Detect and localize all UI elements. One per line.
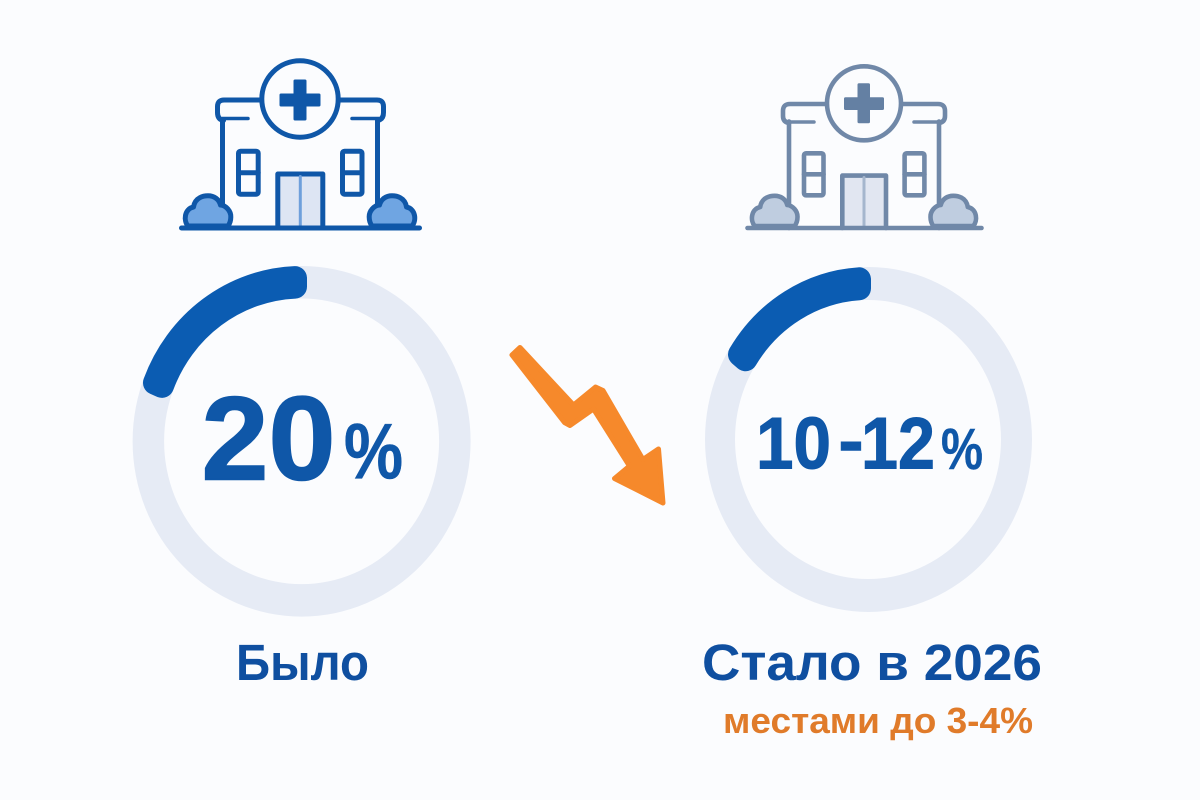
chart: ring before	[133, 266, 471, 617]
value: 10-12%: 12	[861, 404, 935, 484]
label: стало в 2026: Стало в 2026	[702, 634, 1042, 691]
icon: hospital building (muted)	[748, 66, 982, 228]
icon: hospital building (blue)	[182, 61, 420, 228]
value: 20%	[202, 372, 403, 506]
value: 20%: 20	[202, 372, 336, 506]
note: местами до 3-4%: местами до 3-4%	[723, 700, 1033, 741]
label: было: Было	[236, 634, 369, 691]
arrow: falling orange zigzag	[512, 348, 663, 503]
panel: before (было)	[133, 61, 471, 691]
panel: after (стало)	[702, 66, 1042, 741]
value: 10-12%: -	[838, 400, 864, 481]
value: 10-12%: 10	[756, 404, 831, 484]
value: 10-12%	[756, 400, 983, 484]
value: 10-12%: %	[941, 417, 983, 482]
value: 20%: %	[344, 406, 403, 496]
chart: ring after	[705, 267, 1032, 612]
